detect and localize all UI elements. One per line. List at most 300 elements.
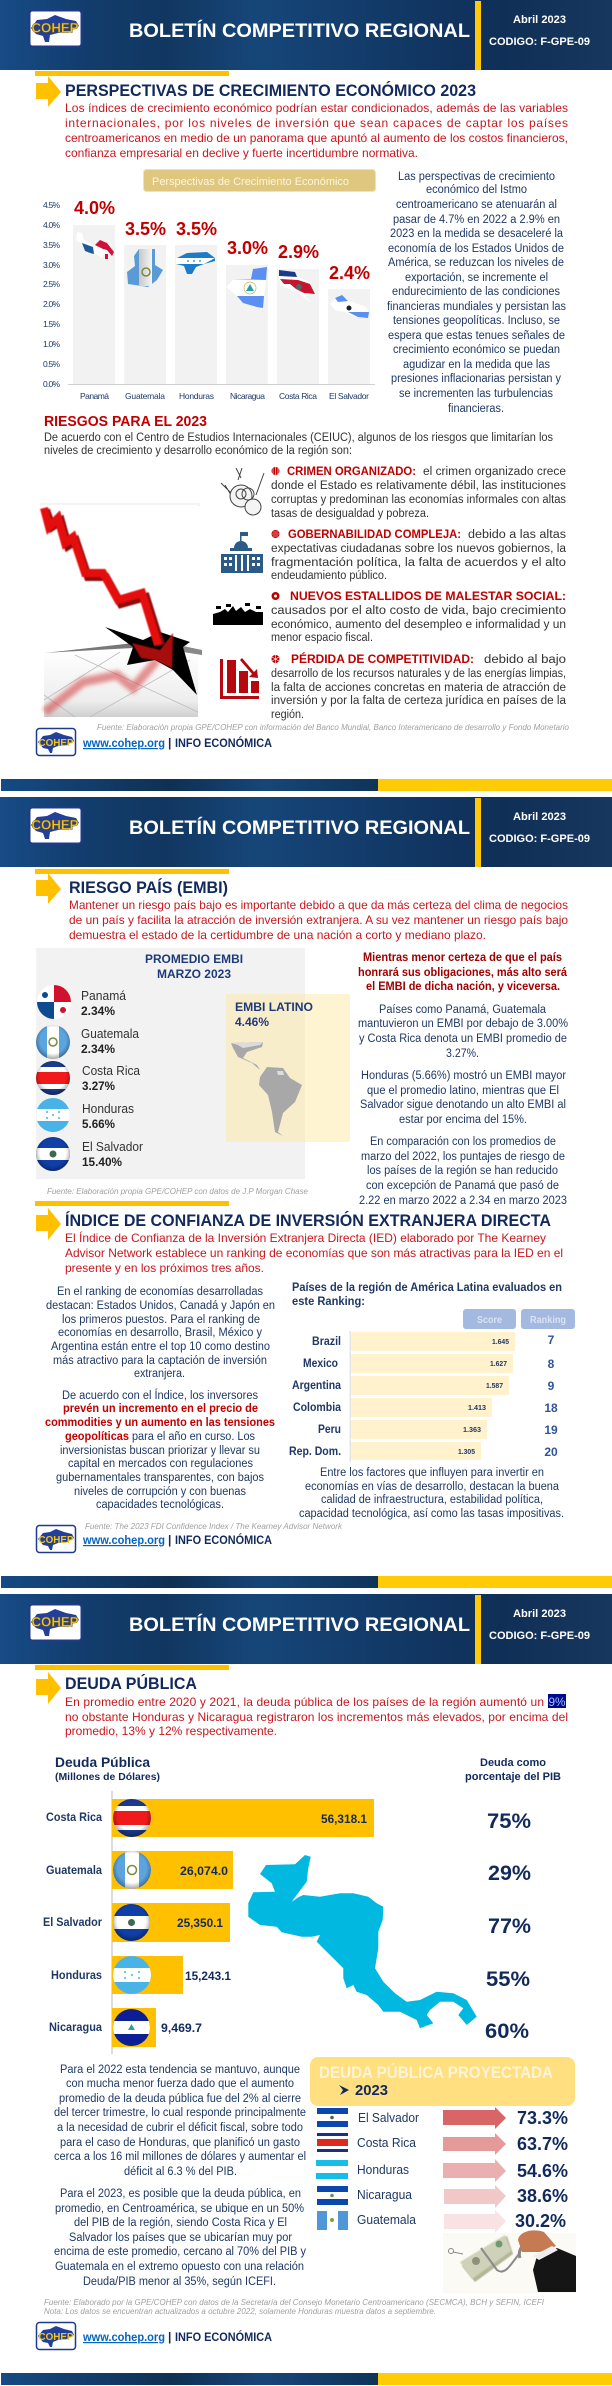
text block: EMBI right column: Honduras (5.66%) mostró un EMBI mayor bbox=[361, 1070, 566, 1082]
footer logo: COHEP bbox=[38, 2332, 74, 2343]
text block: riesgo país intro bbox=[69, 898, 568, 942]
chart heading: deuda pública bbox=[55, 1754, 160, 1783]
risk 1: crimen organizado: donde el Estado es relativamente débil, las instituciones bbox=[271, 480, 566, 492]
y axis labels: 2.5% bbox=[43, 279, 60, 289]
text block: riesgo país intro: de un país y facilita la atracción de inversión extranjera. A su vez mantener un riesgo país bajo bbox=[69, 913, 568, 927]
text block: EMBI right column: Salvador sigue denotando un alto EMBI al bbox=[360, 1099, 566, 1111]
text block: EMBI right column: mantuvieron un EMBI por debajo de 3.00% bbox=[358, 1018, 568, 1030]
y axis labels: 4.5% bbox=[43, 200, 60, 210]
bar: Nicaragua: 9,469.7 bbox=[161, 2021, 202, 2035]
row: El Salvador bbox=[317, 2107, 568, 2129]
source note: IED: Fuente: The 2023 FDI Confidence Index / The Kearney Advisor Network bbox=[85, 1522, 343, 1531]
category labels: Honduras bbox=[179, 391, 214, 401]
row: Costa Rica: Costa Rica bbox=[357, 2136, 416, 2150]
date: Abril 2023 bbox=[513, 1608, 566, 1620]
country values bbox=[81, 989, 143, 1169]
text block: EMBI right column bbox=[358, 952, 568, 1207]
text block: IED left column: para el año en curso. Los bbox=[132, 1431, 255, 1443]
flag: Panamá bbox=[37, 985, 71, 1019]
panel: deuda pública proyectada: 2023 bbox=[355, 2082, 388, 2099]
text block: IED left column: geopolíticas bbox=[65, 1431, 129, 1443]
ranking values: 19 bbox=[544, 1423, 558, 1437]
ranking values bbox=[544, 1333, 558, 1459]
band: page 3 footer bbox=[1, 2373, 612, 2385]
map flag: Nicaragua bbox=[226, 267, 267, 308]
text block: deuda intro: no obstante Honduras y Nicaragua registraron los incrementos más elevados, por encima del bbox=[65, 1710, 568, 1724]
flag: El Salvador bbox=[36, 1137, 70, 1171]
footer logo: COHEP bbox=[38, 738, 74, 749]
y axis labels bbox=[43, 200, 60, 389]
section heading: deuda pública: DEUDA PÚBLICA bbox=[65, 1674, 197, 1693]
text block: perspectivas intro: internacionales, por los niveles de inversión que sean capaces de captar los países bbox=[65, 116, 568, 130]
emphasis text: el EMBI de dicha nación, y viceversa. bbox=[366, 981, 560, 993]
text block: IED left column: inversionistas buscan priorizar y llevar su bbox=[60, 1445, 260, 1457]
logo: COHEP: COHEP bbox=[32, 1614, 78, 1630]
bar chart: deuda pública bbox=[43, 1791, 374, 2054]
bar: Guatemala: 26,074.0 bbox=[180, 1864, 228, 1878]
ranking values: 7 bbox=[548, 1333, 555, 1347]
text block: deuda left column: del tercer trimestre, lo cual responde principalmente bbox=[54, 2107, 306, 2119]
text block: perspectivas intro bbox=[65, 101, 568, 160]
ranking values: 20 bbox=[544, 1445, 558, 1459]
text block: perspectivas right column: tensiones geopolíticas. Incluso, se bbox=[393, 315, 560, 327]
row: Costa Rica bbox=[317, 2133, 568, 2155]
text block: riesgos intro: De acuerdo con el Centro de Estudios Internacionales (CEIUC), algunos de los riesgos que limitarían los bbox=[44, 432, 553, 444]
emphasis text: Mientras menor certeza de que el país bbox=[363, 952, 562, 964]
footer link: www.cohep.org bbox=[82, 2330, 165, 2344]
code: CODIGO: F-GPE-09 bbox=[489, 36, 590, 48]
text block: perspectivas right column: Las perspectivas de crecimiento bbox=[398, 171, 555, 183]
text block: riesgos intro: niveles de crecimiento y desarrollo económico de la región son: bbox=[44, 445, 352, 457]
risk 3: nuevos estallidos: menor espacio fiscal. bbox=[271, 632, 373, 644]
text block: EMBI right column: con excepción de Panamá que pasó de bbox=[366, 1180, 559, 1192]
text block: perspectivas right column: agudizar en la medida que las bbox=[403, 359, 550, 371]
header: page 3 bbox=[0, 1594, 612, 1664]
row: Guatemala: Guatemala bbox=[357, 2213, 416, 2227]
row: Costa Rica: 63.7% bbox=[517, 2134, 568, 2154]
bar: Nicaragua: Nicaragua bbox=[49, 2022, 103, 2034]
section heading: IED: ÍNDICE DE CONFIANZA DE INVERSIÓN EXTRANJERA DIRECTA bbox=[65, 1211, 551, 1230]
row: Honduras: 54.6% bbox=[517, 2161, 568, 2181]
text block: IED left column: capacidades tecnológicas. bbox=[96, 1499, 224, 1511]
logo: COHEP bbox=[30, 808, 82, 844]
icon: government building bbox=[221, 532, 263, 573]
text block: EMBI right column: En comparación con los promedios de bbox=[370, 1136, 556, 1148]
text block: perspectivas right column: financieras mundiales y persistan las bbox=[387, 301, 566, 313]
date: Abril 2023 bbox=[513, 811, 566, 823]
text block: perspectivas right column: pasar de 4.7% en 2022 a 2.9% en bbox=[393, 214, 560, 226]
text block: IED left column: más atractivo para la captación de inversión bbox=[53, 1355, 267, 1367]
map: Central America bbox=[248, 1855, 477, 2028]
score values bbox=[458, 1339, 509, 1456]
text block: perspectivas right column: América, se reduzcan los niveles de bbox=[388, 257, 564, 269]
y axis labels: 4.0% bbox=[43, 220, 60, 230]
text block: IED left column bbox=[45, 1286, 275, 1511]
text block: IED left column: extranjera. bbox=[134, 1368, 185, 1380]
y axis labels: 2.0% bbox=[43, 299, 60, 309]
country values: 2.34% bbox=[81, 1044, 115, 1056]
category labels: El Salvador bbox=[329, 391, 369, 401]
text block: perspectivas right column: endurecimiento de las condiciones bbox=[392, 286, 560, 298]
risk 1: crimen organizado: el crimen organizado crece bbox=[423, 466, 566, 478]
emphasis text: honrará sus obligaciones, más alto será bbox=[358, 967, 568, 979]
bar: El Salvador: El Salvador bbox=[43, 1917, 102, 1929]
row: El Salvador: 73.3% bbox=[517, 2108, 568, 2128]
text block: deuda left column: encima de este promedio, cercano al 70% del PIB y bbox=[54, 2246, 306, 2258]
stat column: deuda como porcentaje del PIB bbox=[485, 1809, 531, 2043]
source note: deuda: Fuente: Elaborado por la GPE/COHEP con datos de la Secretaría del Consejo Monetario Centroamericano (SECMCA), BCH y SEFIN, ICEFI bbox=[44, 2298, 545, 2307]
footer: page 3 bbox=[36, 2322, 272, 2350]
row: Honduras bbox=[316, 2159, 568, 2182]
text block: IED factors: calidad de infraestructura, estabilidad política, bbox=[321, 1494, 543, 1506]
row: Honduras: Honduras bbox=[357, 2163, 409, 2177]
risk 4: pérdida de competitividad: región. bbox=[271, 709, 304, 721]
section heading: IED bbox=[35, 1201, 551, 1240]
risk 4: pérdida de competitividad bbox=[271, 653, 567, 721]
text block: IED left column: De acuerdo con el Índice, los inversores bbox=[62, 1389, 258, 1402]
text block: perspectivas right column: financieras. bbox=[448, 403, 504, 415]
risk 3: nuevos estallidos: causados por el alto costo de vida, bajo crecimiento bbox=[271, 605, 566, 617]
category labels: Costa Rica bbox=[279, 391, 317, 401]
category labels: Guatemala bbox=[125, 391, 165, 401]
footer link: www.cohep.org bbox=[82, 1533, 165, 1547]
highlighted figure: 9% bbox=[548, 1695, 566, 1709]
chart heading: deuda pública: (Millones de Dólares) bbox=[55, 1772, 160, 1783]
header: page 1 bbox=[0, 0, 612, 70]
risk 2: gobernabilidad compleja bbox=[271, 529, 567, 582]
footer: page 1 bbox=[36, 728, 272, 756]
text block: deuda left column: Para el 2023, es posible que la deuda pública, en bbox=[60, 2188, 301, 2200]
y axis labels: 1.0% bbox=[43, 339, 60, 349]
row: Guatemala: 30.2% bbox=[515, 2211, 566, 2231]
chart heading: deuda pública: Deuda Pública bbox=[55, 1754, 150, 1770]
text block: deuda left column bbox=[54, 2064, 306, 2288]
stat column: deuda como porcentaje del PIB: 77% bbox=[488, 1914, 531, 1938]
score values: 1.305 bbox=[458, 1449, 475, 1456]
row: El Salvador: El Salvador bbox=[358, 2111, 419, 2125]
text block: IED left column: En el ranking de economías desarrolladas bbox=[57, 1286, 263, 1298]
source note: page 1: Fuente: Elaboración propia GPE/COHEP con información del Banco Mundial, Banco Interamericano de desarrollo y Fondo Monetario bbox=[97, 723, 570, 732]
value labels: 3.0% bbox=[227, 238, 268, 258]
text block: IED intro: Advisor Network establece un ranking de economías que son más atractivas para la IED en el bbox=[65, 1246, 563, 1260]
text block: EMBI right column: que el promedio latino, mientras que El bbox=[367, 1085, 559, 1097]
bar: Guatemala bbox=[46, 1851, 233, 1889]
country labels: Peru bbox=[318, 1424, 341, 1436]
source note: EMBI: Fuente: Elaboración propia GPE/COHEP con datos de J.P Morgan Chase bbox=[47, 1187, 309, 1196]
icon: bullet arrow bbox=[339, 2085, 349, 2095]
text block: deuda left column: promedio de la deuda pública fue del 2% al cierre bbox=[59, 2093, 301, 2105]
text block: IED intro bbox=[65, 1230, 563, 1275]
chart heading: ranking: Países de la región de América Latina evaluados en bbox=[292, 1282, 562, 1294]
title: BOLETÍN COMPETITIVO REGIONAL bbox=[129, 19, 470, 42]
risk 1: crimen organizado: tasas de desigualdad y pobreza. bbox=[271, 508, 429, 520]
map: Latin America bbox=[231, 1042, 302, 1136]
row: Nicaragua: 38.6% bbox=[517, 2186, 568, 2206]
text block: perspectivas right column: económico del Istmo bbox=[426, 184, 527, 196]
source note: deuda bbox=[44, 2298, 545, 2316]
flag: Guatemala bbox=[36, 1025, 70, 1059]
text block: IED left column: gubernamentales transparentes, con bajos bbox=[56, 1472, 264, 1484]
bar: Honduras: 15,243.1 bbox=[185, 1969, 231, 1983]
bar: Costa Rica: 56,318.1 bbox=[321, 1812, 367, 1826]
value labels: 2.9% bbox=[278, 242, 319, 262]
footer logo bbox=[36, 2322, 76, 2350]
y axis labels: 1.5% bbox=[43, 319, 60, 329]
logo: COHEP: COHEP bbox=[32, 20, 78, 36]
panel title: PROMEDIO EMBI bbox=[145, 952, 243, 966]
text block: perspectivas right column: economía de los Estados Unidos de bbox=[388, 243, 564, 255]
ranking values: 9 bbox=[548, 1379, 555, 1393]
chart title pill bbox=[144, 170, 376, 192]
row: Guatemala bbox=[317, 2210, 566, 2233]
chart title pill: Perspectivas de Crecimiento Económico bbox=[152, 176, 349, 188]
title: BOLETÍN COMPETITIVO REGIONAL bbox=[129, 1613, 470, 1636]
icon: protest crowd bbox=[213, 603, 263, 625]
panel: deuda pública proyectada bbox=[310, 2057, 575, 2106]
text block: IED intro: El Índice de Confianza de la Inversión Extranjera Directa (IED) elaborado por The Kearney bbox=[65, 1230, 546, 1245]
risk list bbox=[271, 466, 567, 721]
bar: Costa Rica: Costa Rica bbox=[46, 1812, 103, 1824]
category labels: Nicaragua bbox=[230, 391, 265, 401]
score values: 1.645 bbox=[492, 1339, 509, 1346]
risk 2: gobernabilidad compleja: expectativas ciudadanas sobre los nuevos gobiernos, la bbox=[271, 543, 567, 555]
title: BOLETÍN COMPETITIVO REGIONAL bbox=[129, 816, 470, 839]
text block: EMBI right column: estar por encima del 15%. bbox=[399, 1114, 527, 1126]
bar: Nicaragua bbox=[49, 2008, 202, 2047]
country values: El Salvador bbox=[82, 1140, 143, 1154]
bar: Costa Rica bbox=[46, 1799, 374, 1837]
map flag: Guatemala bbox=[127, 249, 163, 287]
risk 3: nuevos estallidos: económico, aumento del desempleo e informalidad y un bbox=[271, 619, 566, 631]
text block: deuda left column: a la necesidad de cubrir el déficit fiscal, sobre todo bbox=[57, 2122, 303, 2134]
text block: perspectivas right column bbox=[387, 171, 566, 415]
text block: IED factors bbox=[299, 1467, 564, 1520]
risk 1: crimen organizado: corruptas y predominan las economías informales con altas bbox=[271, 494, 566, 506]
text block: riesgo país intro: Mantener un riesgo país bajo es importante debido a que da más certeza del clima de negocios bbox=[69, 898, 568, 912]
section heading: riesgo país: RIESGO PAÍS (EMBI) bbox=[69, 878, 228, 897]
ranking values: 8 bbox=[548, 1357, 555, 1371]
text block: deuda left column: promedio, en Centroamérica, se ubique en un 50% bbox=[55, 2203, 304, 2215]
emphasis text bbox=[358, 952, 568, 993]
text block: IED factors: Entre los factores que influyen para invertir en bbox=[320, 1467, 544, 1479]
footer: page 2: INFO ECONÓMICA bbox=[175, 1532, 272, 1547]
panel title bbox=[145, 952, 243, 981]
callout: EMBI latino: 4.46% bbox=[235, 1017, 269, 1029]
illustration: handcuffed money bbox=[443, 2230, 576, 2293]
country labels: Rep. Dom. bbox=[289, 1446, 341, 1458]
text block: IED left column: los primeros puestos. Para el ranking de bbox=[62, 1314, 260, 1326]
text block: deuda left column: Para el 2022 esta tendencia se mantuvo, aunque bbox=[60, 2064, 300, 2076]
panel: promedio EMBI bbox=[36, 948, 305, 1179]
footer link: www.cohep.org bbox=[82, 736, 165, 750]
country labels: Mexico bbox=[303, 1358, 338, 1370]
footer: page 2 bbox=[36, 1526, 272, 1552]
chart heading: porcentaje del PIB: Deuda como bbox=[480, 1757, 546, 1769]
country values: 15.40% bbox=[82, 1157, 122, 1169]
text block: riesgos intro bbox=[44, 432, 553, 457]
chart heading: porcentaje del PIB bbox=[465, 1757, 561, 1783]
bar chart: ranking IED bbox=[289, 1309, 575, 1462]
text block: IED left column: commodities y un aumento en las tensiones bbox=[45, 1417, 275, 1429]
section heading: riesgo país bbox=[35, 869, 229, 904]
text block: IED left column: capital en mercados con regulaciones bbox=[68, 1458, 253, 1470]
text block: perspectivas intro: confianza empresarial en declive y fuerte incertidumbre normativa. bbox=[65, 146, 418, 160]
text block: perspectivas right column: crecimiento económico se puedan bbox=[393, 344, 560, 356]
panel: deuda pública proyectada: DEUDA PÚBLICA PROYECTADA bbox=[319, 2063, 553, 2082]
header: page 2 bbox=[0, 797, 612, 867]
country values: Panamá bbox=[81, 989, 126, 1003]
score and ranking headers: Ranking bbox=[530, 1315, 566, 1326]
risk 2: gobernabilidad compleja: debido a las altas bbox=[468, 529, 566, 541]
country labels: Argentina bbox=[292, 1380, 342, 1392]
text block: EMBI right column: 2.22 en marzo 2022 a 2.34 en marzo 2023 bbox=[359, 1195, 567, 1207]
value labels bbox=[74, 198, 370, 283]
code: CODIGO: F-GPE-09 bbox=[489, 833, 590, 845]
country labels: Brazil bbox=[312, 1336, 341, 1348]
text block: perspectivas intro: Los índices de crecimiento económico podrían estar condicionados, además de las variables bbox=[65, 101, 568, 115]
date: Abril 2023 bbox=[513, 14, 566, 26]
source note: deuda: Nota: Los datos se encuentran actualizados a octubre 2022, solamente Honduras muestra datos a septiembre. bbox=[44, 2307, 436, 2316]
text block: perspectivas right column: espera que estas tenues señales de bbox=[388, 330, 565, 342]
section heading: deuda pública bbox=[35, 1665, 229, 1704]
text block: deuda left column: con mucha menor fuerza dado que el aumento bbox=[66, 2078, 294, 2090]
flag: Costa Rica bbox=[36, 1061, 70, 1095]
y axis labels: 3.5% bbox=[43, 240, 60, 250]
text block: EMBI right column: marzo del 2022, los puntajes de riesgo de bbox=[361, 1151, 565, 1163]
illustration: falling red arrow bbox=[40, 503, 202, 717]
score values: 1.627 bbox=[490, 1361, 507, 1368]
icon: declining bar chart bbox=[220, 658, 259, 699]
map flag: Honduras bbox=[176, 252, 215, 274]
footer: page 3: | bbox=[168, 2330, 171, 2344]
text block: deuda left column: del PIB de la región, siendo Costa Rica y El bbox=[74, 2217, 287, 2229]
logo: COHEP bbox=[30, 1604, 82, 1640]
bars bbox=[73, 225, 370, 384]
score bars bbox=[351, 1332, 515, 1460]
country values: Guatemala bbox=[81, 1027, 139, 1041]
country values: Honduras bbox=[82, 1102, 134, 1116]
bar: Honduras bbox=[51, 1956, 231, 1994]
text block: EMBI right column: y Costa Rica denota un EMBI promedio de bbox=[359, 1033, 567, 1045]
bar: El Salvador bbox=[43, 1903, 230, 1942]
icon: fists and rope bbox=[221, 468, 264, 515]
country values: 2.34% bbox=[81, 1006, 115, 1018]
risk 4: pérdida de competitividad: debido al bajo bbox=[484, 654, 566, 666]
value labels: 2.4% bbox=[329, 263, 370, 283]
text block: EMBI right column: los países de la región se han reducido bbox=[367, 1165, 558, 1177]
logo: COHEP: COHEP bbox=[32, 818, 78, 832]
risk 3: nuevos estallidos: NUEVOS ESTALLIDOS DE MALESTAR SOCIAL: bbox=[290, 591, 566, 603]
band: page 1 footer bbox=[1, 779, 612, 791]
text block: perspectivas intro: centroamericanos en medio de un panorama que apuntó al aumento de los costos financieros, bbox=[65, 131, 568, 145]
score values: 1.413 bbox=[468, 1405, 486, 1412]
footer: page 1: | bbox=[168, 736, 171, 750]
text block: EMBI right column: Países como Panamá, Guatemala bbox=[379, 1004, 547, 1016]
text block: deuda intro: promedio, 13% y 12% respectivamente. bbox=[65, 1724, 277, 1738]
chart heading: ranking bbox=[292, 1282, 562, 1308]
callout: EMBI latino: EMBI LATINO bbox=[235, 1000, 313, 1014]
logo: COHEP bbox=[30, 10, 82, 46]
risk 3: nuevos estallidos bbox=[271, 591, 566, 644]
risk 4: pérdida de competitividad: la falta de acciones concretas en materia de atracción de bbox=[271, 682, 566, 694]
text block: IED left column: niveles de corrupción y con buenas bbox=[74, 1486, 246, 1498]
map flag: Panamá bbox=[76, 232, 114, 259]
text block: IED intro: presente y en los próximos tres años. bbox=[65, 1261, 264, 1275]
bar: Guatemala: Guatemala bbox=[46, 1865, 103, 1877]
stat column: deuda como porcentaje del PIB: 29% bbox=[488, 1861, 531, 1885]
risk 4: pérdida de competitividad: inversión y por la falta de certeza jurídica en países de la bbox=[271, 695, 567, 707]
text block: deuda left column: Deuda/PIB menor al 35%, según ICEFI. bbox=[83, 2276, 276, 2288]
chart heading: ranking: este Ranking: bbox=[292, 1296, 365, 1308]
text block: riesgo país intro: demuestra el estado de la certidumbre de una nación a corto y mediano plazo. bbox=[69, 928, 486, 942]
text block: IED factors: capacidad tecnológica, así como las tasas impositivas. bbox=[299, 1508, 564, 1520]
text block: deuda left column: Guatemala en el extremo opuesto con una relación bbox=[55, 2261, 304, 2273]
value labels: 3.5% bbox=[176, 219, 217, 239]
footer: page 2: | bbox=[168, 1533, 171, 1547]
panel title: MARZO 2023 bbox=[157, 967, 231, 981]
country values: 5.66% bbox=[82, 1119, 115, 1131]
text block: deuda left column: para el caso de Honduras, que planificó un gasto bbox=[60, 2137, 300, 2149]
callout: EMBI latino bbox=[226, 994, 350, 1142]
footer logo bbox=[36, 1526, 76, 1552]
text block: IED factors: economías en vías de desarrollo, destacan la buena bbox=[305, 1481, 560, 1493]
bar: Honduras: Honduras bbox=[51, 1970, 102, 1982]
country labels: Colombia bbox=[293, 1402, 342, 1414]
country values: Costa Rica bbox=[82, 1064, 140, 1078]
risk 4: pérdida de competitividad: desarrollo de los recursos naturales y de las energías limpias, bbox=[271, 668, 566, 680]
y axis labels: 3.0% bbox=[43, 260, 60, 270]
text block: perspectivas right column: presiones inflacionarias persistan y bbox=[391, 373, 561, 385]
score and ranking headers: Score bbox=[477, 1315, 502, 1326]
ranking values: 18 bbox=[544, 1401, 558, 1415]
text block: deuda left column: Salvador los países que se ubicarían muy por bbox=[69, 2232, 292, 2244]
value labels: 4.0% bbox=[74, 198, 115, 218]
country labels bbox=[289, 1336, 342, 1458]
risk 4: pérdida de competitividad: PÉRDIDA DE COMPETITIVIDAD: bbox=[291, 653, 474, 666]
text block: deuda intro: En promedio entre 2020 y 2021, la deuda pública de los países de la región aumentó un bbox=[65, 1695, 544, 1709]
flag: Honduras bbox=[36, 1098, 70, 1132]
text block: deuda intro bbox=[65, 1694, 568, 1738]
text block: perspectivas right column: centroamericano se atenuarán al bbox=[396, 199, 557, 211]
category labels: Panamá bbox=[80, 391, 109, 401]
text block: perspectivas right column: se incrementen las turbulencias bbox=[399, 388, 553, 400]
risk 1: crimen organizado bbox=[271, 466, 566, 520]
footer: page 3: INFO ECONÓMICA bbox=[175, 2329, 272, 2344]
score values: 1.587 bbox=[486, 1383, 503, 1390]
text block: IED left column: prevén un incremento en el precio de bbox=[63, 1403, 258, 1415]
country values: 3.27% bbox=[82, 1081, 115, 1093]
row: Nicaragua: Nicaragua bbox=[357, 2188, 412, 2202]
footer: page 1: INFO ECONÓMICA bbox=[175, 735, 272, 750]
code: CODIGO: F-GPE-09 bbox=[489, 1630, 590, 1642]
footer logo bbox=[36, 728, 76, 756]
footer logo: COHEP bbox=[38, 1535, 74, 1546]
text block: EMBI right column: 3.27%. bbox=[446, 1048, 479, 1060]
score and ranking headers bbox=[463, 1309, 575, 1329]
risk 1: crimen organizado: CRIMEN ORGANIZADO: bbox=[287, 466, 416, 478]
band: page 2 footer bbox=[1, 1576, 612, 1588]
bar: El Salvador: 25,350.1 bbox=[177, 1916, 223, 1930]
map flag: El Salvador bbox=[330, 295, 369, 318]
risk 2: gobernabilidad compleja: fragmentación política, la falta de acuerdos y el alto bbox=[271, 557, 566, 569]
text block: deuda left column: cerca a los 16 mil millones de dólares y aumentar el bbox=[54, 2151, 306, 2163]
value labels: 3.5% bbox=[125, 219, 166, 239]
stat column: deuda como porcentaje del PIB: 60% bbox=[485, 2019, 529, 2043]
risk 2: gobernabilidad compleja: GOBERNABILIDAD COMPLEJA: bbox=[288, 529, 461, 541]
text block: perspectivas right column: 2023 en la medida se desaceleré la bbox=[390, 228, 564, 240]
score values: 1.363 bbox=[463, 1427, 481, 1434]
chart heading: porcentaje del PIB: porcentaje del PIB bbox=[465, 1771, 561, 1783]
